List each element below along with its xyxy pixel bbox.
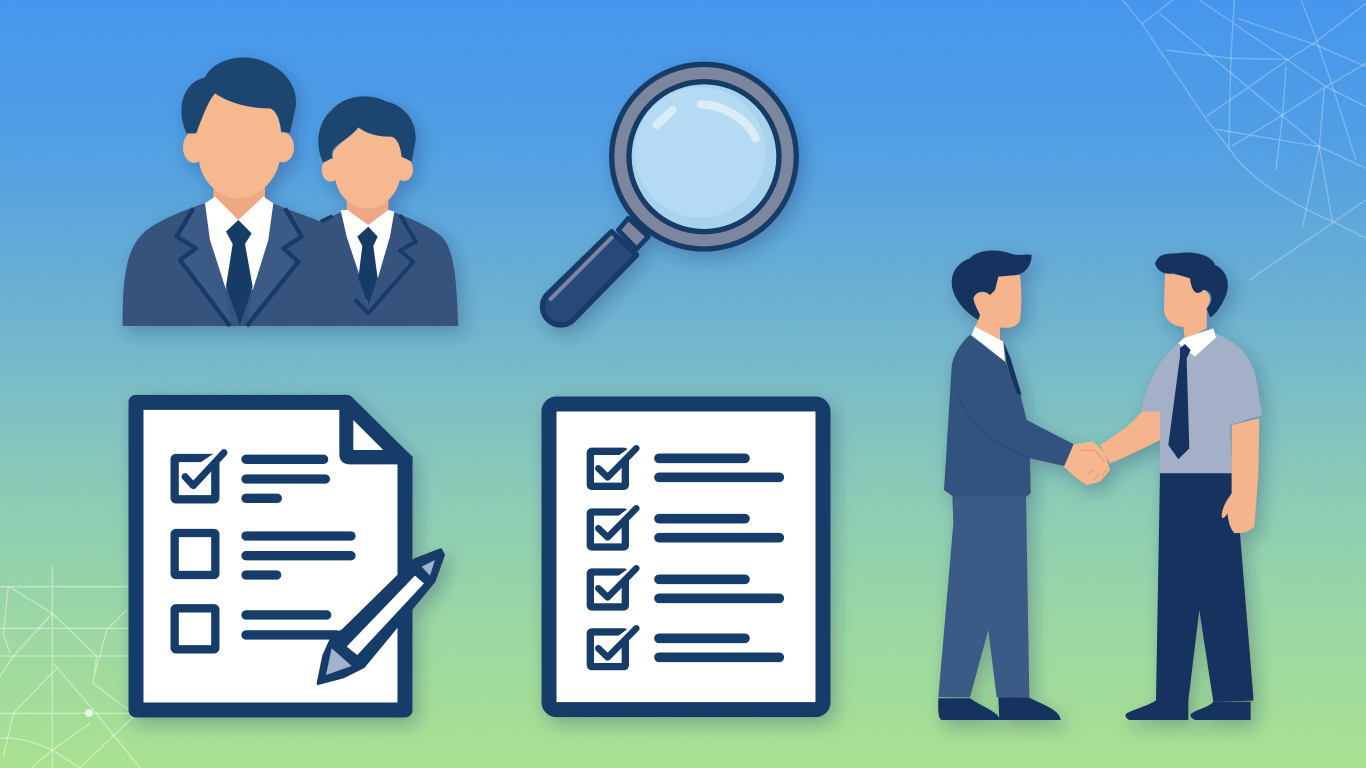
suit bodies [123,203,458,326]
network node [85,709,93,717]
icon: completed checklist [549,404,823,710]
paper [136,402,405,710]
lens highlights [657,104,756,138]
text lines [246,459,351,635]
lens ring [612,64,796,249]
right man [1100,252,1262,720]
handle [618,218,648,249]
check marks [618,448,636,642]
text lines [659,458,779,657]
icon: two businessmen [123,57,458,326]
check mark [202,453,224,468]
paper [549,404,823,710]
checkboxes [590,451,625,667]
smaller man [318,96,416,313]
pencil [318,550,443,683]
icon: checklist document with pencil [136,402,443,710]
network lines: top right [1123,0,1366,280]
clasped hands [1064,442,1110,485]
folded corner [339,402,413,464]
network lines: bottom left [0,567,140,768]
icon: magnifying glass [542,64,796,325]
checkboxes [175,458,215,649]
left man [938,251,1073,720]
icon: two men shaking hands [938,251,1262,720]
larger man [177,57,302,326]
